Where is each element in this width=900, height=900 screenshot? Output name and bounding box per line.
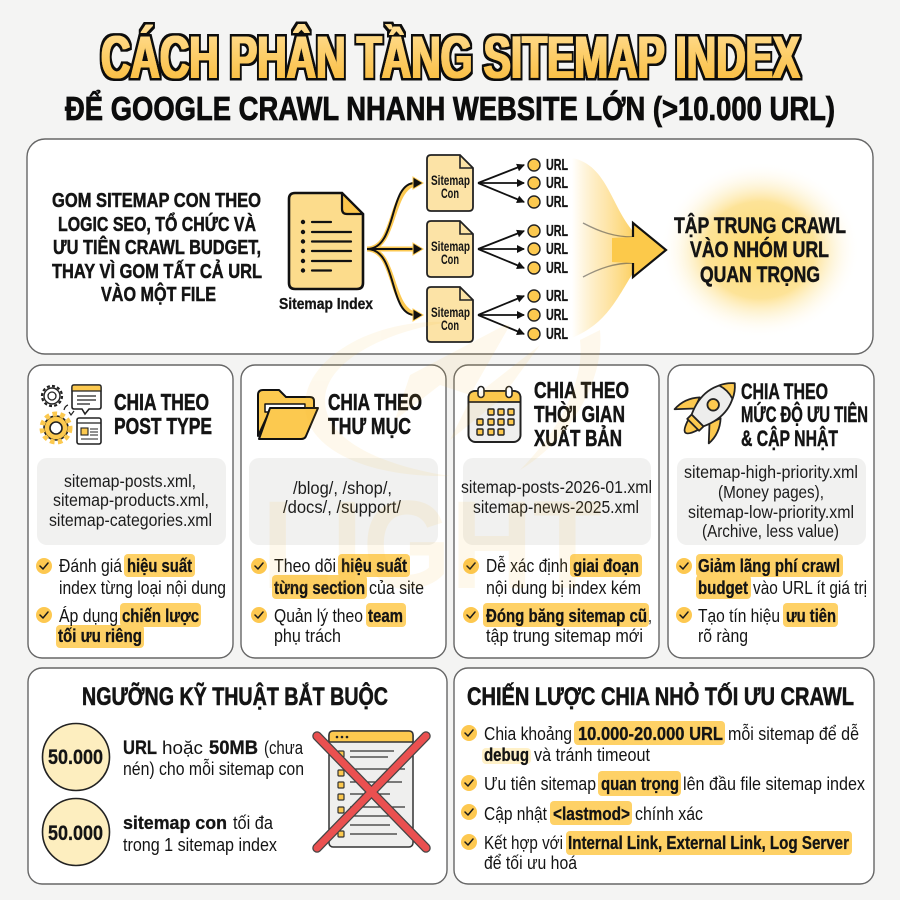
example file names: sitemap-news-2025.xml <box>473 497 639 517</box>
benefit 2: , <box>648 606 652 626</box>
benefit 1: hiệu suất <box>127 556 192 576</box>
benefit 1: vào URL ít giá trị <box>753 578 867 598</box>
overview text: VÀO MỘT FILE <box>101 282 216 306</box>
tip 2 <box>461 771 865 796</box>
heading: CHIA THEO <box>328 389 422 415</box>
stat text: sitemap limit: tối đa <box>233 813 274 833</box>
example file names: (Archive, less value) <box>702 521 839 541</box>
example folders: /blog/, /shop/, <box>293 478 392 498</box>
tip 2: Ưu tiên sitemap <box>484 774 596 794</box>
benefit 1: Dễ xác định <box>486 555 568 576</box>
stat text: sitemap limit <box>123 813 277 855</box>
benefit 2: rõ ràng <box>698 626 748 646</box>
child sitemap 2 <box>427 221 473 277</box>
panel: technical limits <box>28 668 447 884</box>
benefit 2: team <box>368 606 403 626</box>
arrows: index to child sitemaps <box>367 177 423 321</box>
arrows: child sitemaps to URLs <box>478 165 524 334</box>
watermark logo: LIGHT <box>262 476 602 615</box>
icon: calendar <box>468 386 520 442</box>
URL labels: URL <box>546 194 568 211</box>
tip 1: Chia khoảng <box>484 724 572 744</box>
panel: folders <box>241 365 446 658</box>
URL labels: URL <box>546 223 568 240</box>
child sitemap 1: Sitemap <box>431 173 470 188</box>
example file names: sitemap-high-priority.xml <box>684 462 858 482</box>
stat text: URL limit: URL <box>123 738 157 759</box>
example file names: (Money pages), <box>718 482 824 502</box>
tip 1 <box>461 721 859 765</box>
heading <box>114 389 212 439</box>
heading: THỜI GIAN <box>534 400 625 427</box>
example file names: sitemap-products.xml, <box>53 490 209 510</box>
overview text: GOM SITEMAP CON THEO <box>52 190 261 212</box>
benefit 2: Tạo tín hiệu <box>698 606 780 626</box>
tip 3: Cập nhật <box>484 804 547 824</box>
benefit 1 <box>251 554 424 599</box>
overview text <box>52 190 262 306</box>
stat: sitemap limit <box>42 798 110 866</box>
example folders: /docs/, /support/ <box>283 497 401 517</box>
URL labels: URL <box>546 326 568 343</box>
child sitemap 1 <box>427 155 473 211</box>
URL labels: URL <box>546 157 568 174</box>
stat text: URL limit: (chưa <box>264 738 304 758</box>
result text <box>674 213 846 287</box>
stat text: URL limit: hoặc <box>162 738 203 758</box>
example file names <box>37 458 226 545</box>
example file names: sitemap-posts-2026-01.xml <box>461 477 652 497</box>
label: sitemap index: Sitemap Index <box>279 296 373 313</box>
tip 4 <box>461 831 852 873</box>
example file names: sitemap-posts.xml, <box>64 471 196 491</box>
benefit 1 <box>463 554 642 598</box>
heading: THƯ MỤC <box>328 413 411 439</box>
tip 1: 10.000-20.000 URL <box>578 724 723 744</box>
benefit 1: index từng loại nội dung <box>59 578 226 598</box>
benefit 1: Theo dõi <box>274 556 336 576</box>
benefit 2: tối ưu riêng <box>58 626 142 646</box>
benefit 2 <box>676 603 838 646</box>
icon: crossed-out long sitemap <box>317 731 426 848</box>
benefit 2 <box>251 603 406 646</box>
tip 3: <lastmod> <box>553 804 630 824</box>
stat: URL limit: 50.000 <box>48 746 103 769</box>
tip 4: Kết hợp với <box>484 833 563 853</box>
tip 4: Internal Link, External Link, Log Server <box>568 833 849 853</box>
stat text: URL limit: 50MB <box>209 738 258 759</box>
benefit 2: chiến lược <box>122 606 199 626</box>
stat text: URL limit <box>123 738 304 779</box>
overview text: ƯU TIÊN CRAWL BUDGET, <box>53 235 261 259</box>
benefit 1: hiệu suất <box>341 556 407 576</box>
tip 2: quan trọng <box>601 774 679 794</box>
overview text: THAY VÌ GOM TẤT CẢ URL <box>52 260 262 283</box>
child sitemap 1: Con <box>441 186 459 201</box>
benefit 2: tập trung sitemap mới <box>486 626 643 646</box>
benefit 2: phụ trách <box>274 626 341 646</box>
example file names: sitemap-low-priority.xml <box>688 502 854 522</box>
child sitemap 3: Sitemap <box>431 305 470 320</box>
panel: crawl strategy <box>454 668 874 884</box>
stat text: URL limit: nén) cho mỗi sitemap con <box>123 758 304 779</box>
benefit 1: Đánh giá <box>59 556 123 576</box>
benefit 1 <box>676 554 867 599</box>
URL labels: URL <box>546 241 568 258</box>
result text: TẬP TRUNG CRAWL <box>674 213 846 238</box>
URL labels: URL <box>546 175 568 192</box>
URL labels: URL <box>546 260 568 277</box>
tip 2: lên đầu file sitemap index <box>683 774 865 794</box>
panel: post type <box>28 365 233 658</box>
heading: CHIA THEO <box>741 379 828 404</box>
result text: QUAN TRỌNG <box>700 262 820 287</box>
benefit 2: Áp dụng <box>59 606 118 626</box>
watermark logo <box>262 322 602 615</box>
funnel glow <box>572 158 640 338</box>
stat: sitemap limit: 50.000 <box>48 822 103 845</box>
heading: & CẬP NHẬT <box>741 426 838 451</box>
tip 1: mỗi sitemap để dễ <box>728 723 859 744</box>
heading <box>741 379 868 451</box>
URL labels: URL <box>546 288 568 305</box>
tip 4: để tối ưu hoá <box>484 853 578 873</box>
icon: folder <box>258 390 318 439</box>
heading: XUẤT BẢN <box>534 423 622 451</box>
focus glow <box>660 162 860 338</box>
benefit 1: từng section <box>274 578 365 598</box>
benefit 1: nội dung bị index kém <box>486 578 641 598</box>
benefit 1: Giảm lãng phí crawl <box>698 556 840 576</box>
tip 3 <box>461 801 703 825</box>
benefit 1: của site <box>369 578 424 598</box>
heading: NGƯỠNG KỸ THUẬT BẮT BUỘC <box>82 681 388 711</box>
heading: CHIA THEO <box>534 377 629 403</box>
benefit 2: Đóng băng sitemap cũ <box>486 606 647 626</box>
URL labels: URL <box>546 307 568 324</box>
icon: sitemap index document <box>289 193 363 289</box>
stat: URL limit <box>42 724 110 790</box>
child sitemap 3: Con <box>441 318 459 333</box>
URL labels <box>546 157 568 343</box>
heading <box>534 377 629 451</box>
benefit 2 <box>36 603 201 648</box>
result text: VÀO NHÓM URL <box>690 237 829 262</box>
overview text: LOGIC SEO, TỔ CHỨC VÀ <box>58 212 256 236</box>
example file names <box>461 458 652 545</box>
benefit 2: ưu tiên <box>786 606 836 626</box>
panel: sitemap index overview <box>27 139 873 354</box>
benefit 1: budget <box>698 578 748 598</box>
child sitemap 2: Con <box>441 252 459 267</box>
child sitemap 3 <box>427 287 473 342</box>
heading <box>328 389 422 439</box>
heading: POST TYPE <box>114 413 212 439</box>
example folders <box>249 458 438 545</box>
panel: priority <box>668 365 874 658</box>
icon: gears and content <box>42 385 101 444</box>
tip 1: và tránh timeout <box>534 745 650 765</box>
panel: publish date <box>454 365 659 658</box>
heading: CHIA THEO <box>114 389 209 415</box>
tip 1: debug <box>484 745 529 765</box>
example file names <box>677 458 866 545</box>
benefit 2: Quản lý theo <box>274 606 363 626</box>
stat text: sitemap limit: sitemap con <box>123 813 227 833</box>
big arrow <box>583 223 666 277</box>
benefit 2 <box>463 603 652 646</box>
child sitemap 2: Sitemap <box>431 239 470 254</box>
benefit 1: giai đoạn <box>573 556 639 576</box>
stat text: sitemap limit: trong 1 sitemap index <box>123 835 277 855</box>
icon: rocket <box>668 366 752 450</box>
example file names: sitemap-categories.xml <box>49 510 212 530</box>
tip 3: chính xác <box>635 804 703 824</box>
benefit 1 <box>36 554 226 598</box>
URL dots <box>528 159 540 340</box>
